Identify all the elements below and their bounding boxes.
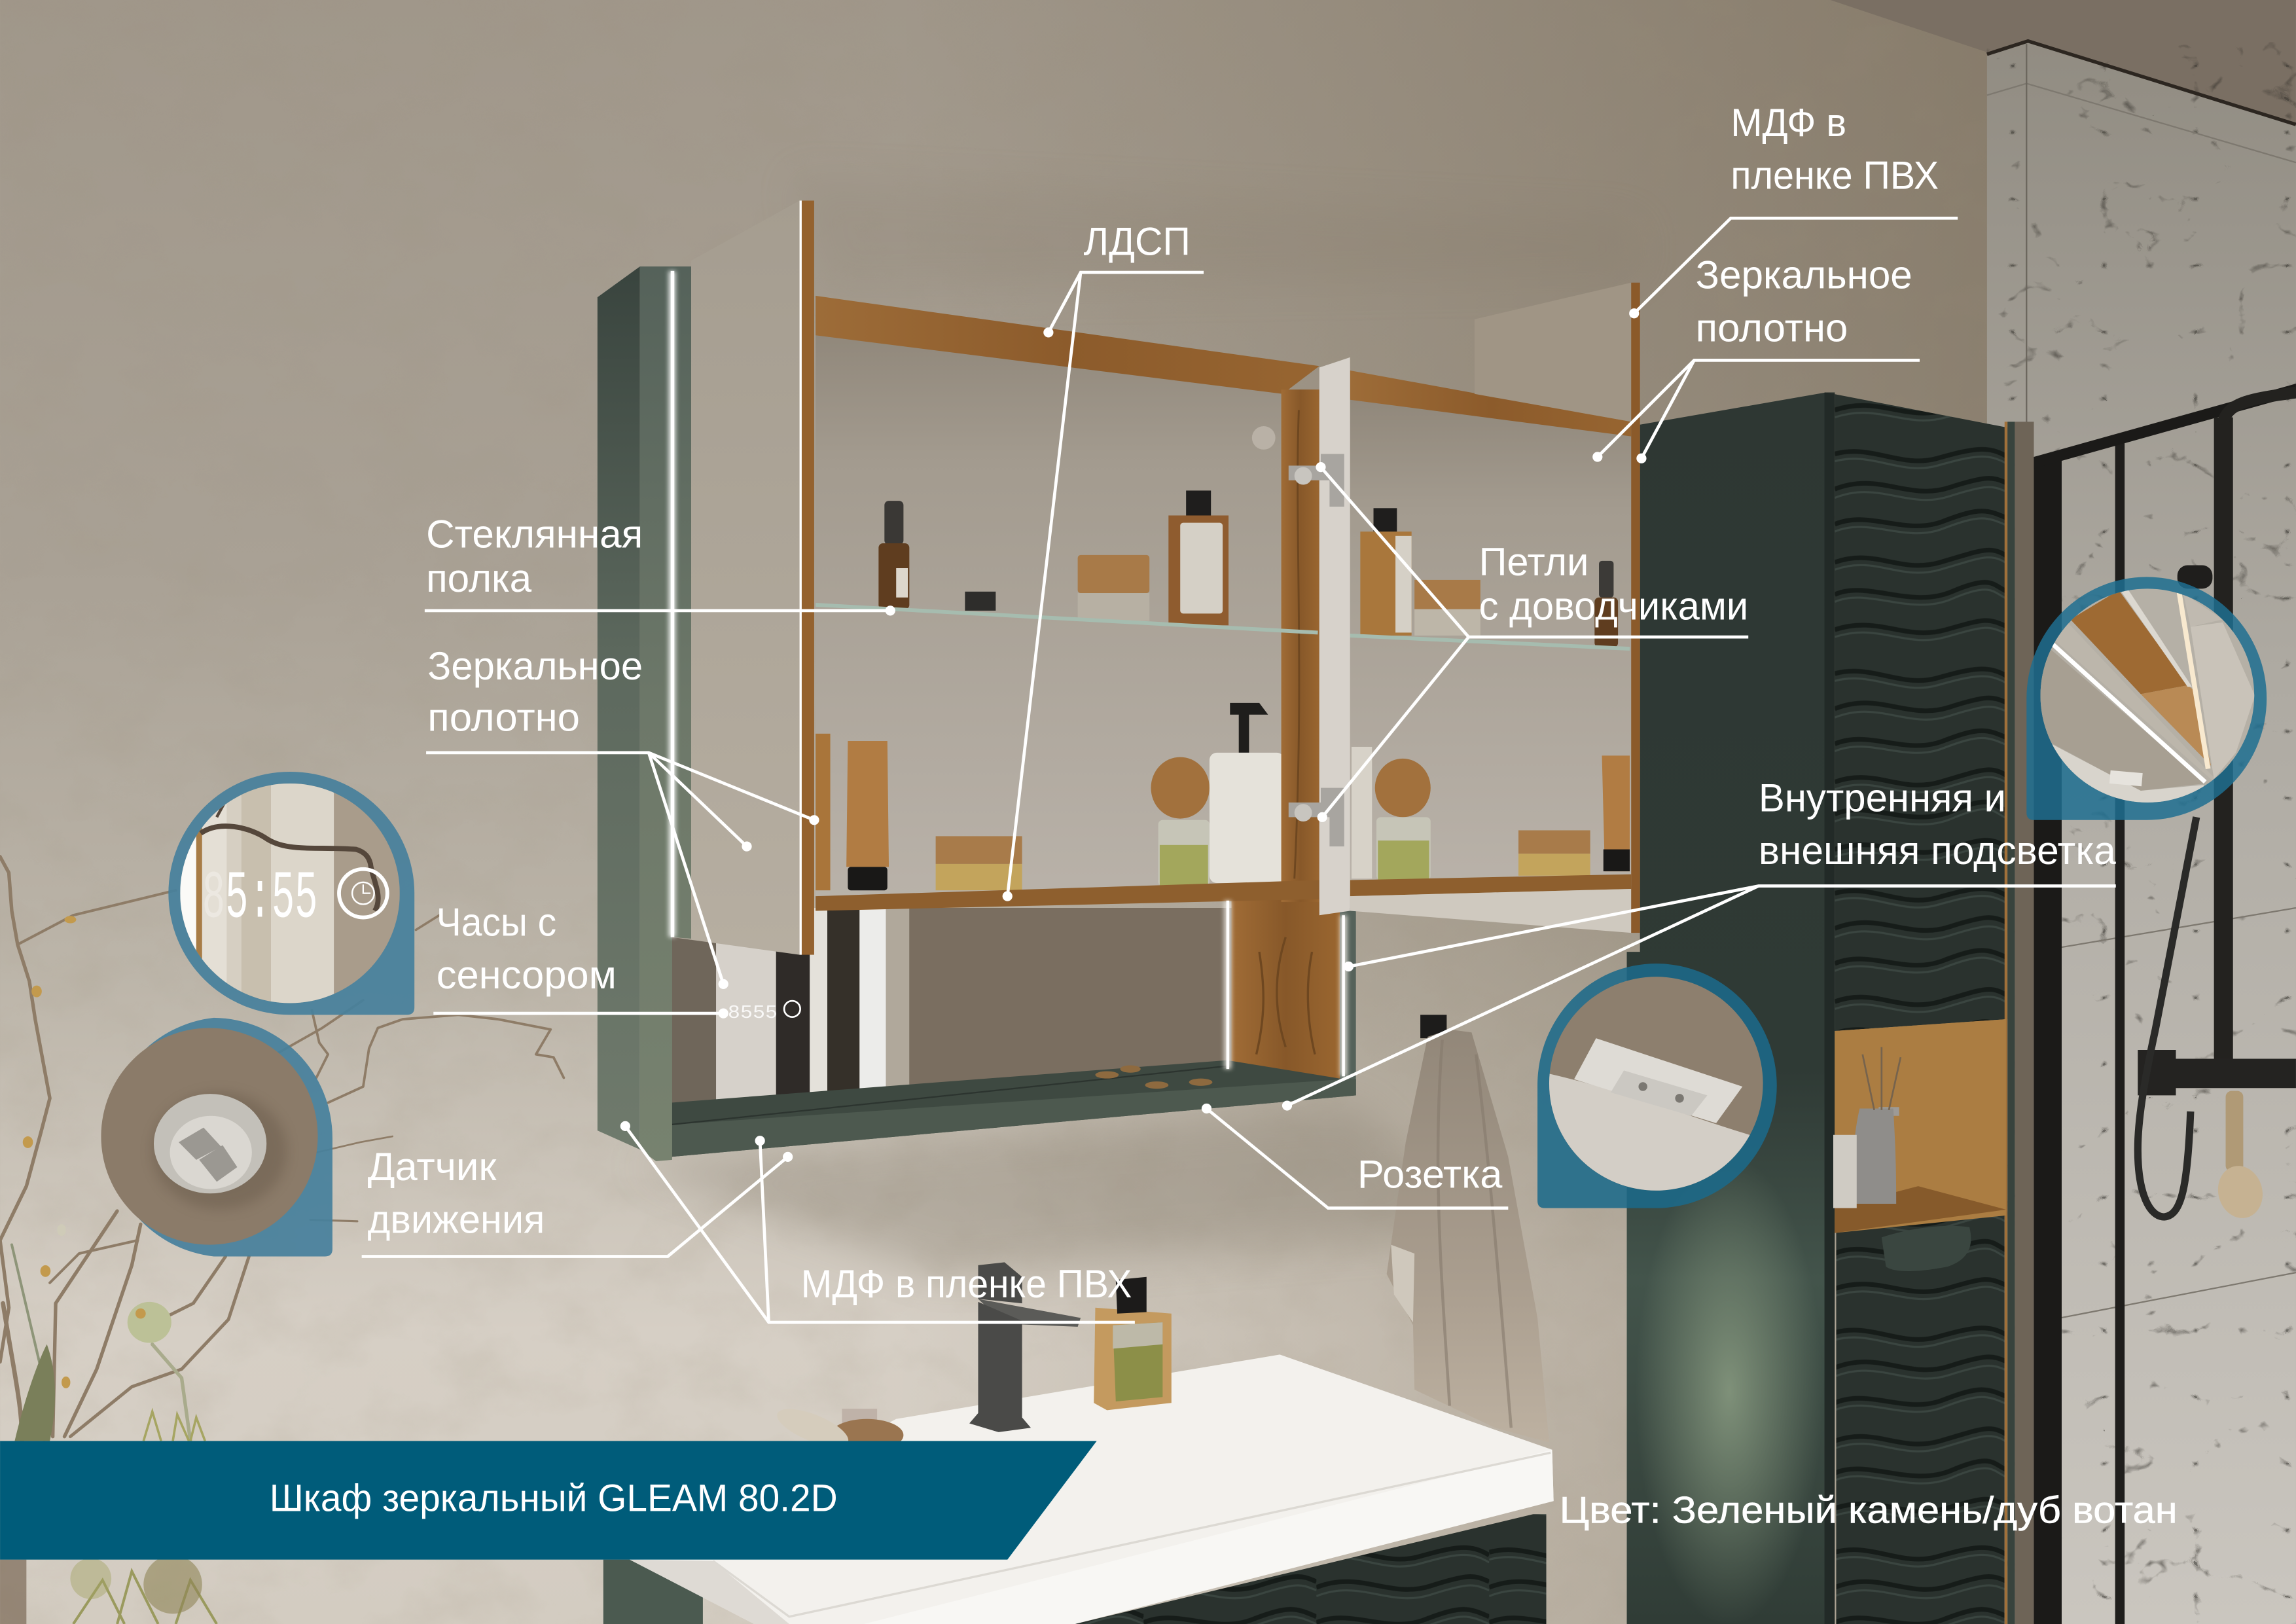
shelf bottles	[816, 490, 1630, 890]
lens: motion sensor	[101, 1018, 332, 1256]
label text: Зеркальное	[1696, 253, 1912, 297]
label text	[1759, 775, 2116, 873]
cabinet back panel	[816, 315, 1631, 901]
callout: MDF bottom	[620, 1121, 1135, 1322]
label text: МДФ в	[1731, 100, 1846, 145]
callout: LDSP	[1003, 219, 1204, 901]
callout: motion sensor	[362, 1144, 793, 1256]
label text: полка	[426, 556, 532, 600]
label text: Датчик	[368, 1144, 497, 1189]
wood column under divider	[1232, 897, 1356, 1095]
label text	[437, 900, 617, 997]
sink with vanity	[603, 1354, 1554, 1624]
LED strips	[668, 271, 1347, 1076]
label text	[368, 1144, 545, 1242]
glass shelves	[816, 605, 1630, 649]
banner title: Шкаф зеркальный GLEAM 80.2D	[270, 1477, 838, 1520]
marble shower wall with ceiling	[1831, 0, 2296, 1624]
lens: socket	[1537, 964, 1777, 1208]
label text	[1479, 539, 1748, 628]
plant buds, poppy and dill	[0, 916, 217, 1624]
label text	[1696, 253, 1912, 350]
label text: Стеклянная	[426, 512, 643, 556]
soap dish with brush	[772, 1401, 903, 1454]
callout: mirror top right	[1592, 253, 1920, 463]
label text: внешняя подсветка	[1759, 828, 2116, 873]
tall cabinet side	[1627, 393, 1835, 1624]
small clock display: 8555	[728, 1002, 778, 1024]
callout: soft-close hinges	[1316, 462, 1748, 822]
small clock display	[728, 1001, 800, 1024]
label text	[426, 512, 643, 600]
label text: Петли	[1479, 539, 1588, 584]
label text: пленке ПВХ	[1731, 153, 1939, 198]
label text: с доводчиками	[1479, 583, 1748, 628]
centre door edge with hinges	[1289, 357, 1350, 915]
cabinet bottom panel	[671, 1060, 1356, 1157]
lens: clock	[168, 772, 414, 1015]
faucet	[969, 1262, 1081, 1432]
label text: Зеркальное	[427, 643, 643, 688]
colour caption: Цвет: Зеленый камень/дуб вотан	[1560, 1490, 2178, 1532]
callout: MDF top right	[1629, 100, 1958, 318]
callout: glass shelf	[425, 512, 895, 615]
left open door	[672, 200, 814, 955]
label text: ЛДСП	[1084, 219, 1191, 263]
callout: socket	[1202, 1104, 1508, 1208]
label text: МДФ в пленке ПВХ	[801, 1261, 1132, 1306]
wood shelves and divider	[816, 296, 1631, 911]
label text: Розетка	[1357, 1151, 1503, 1196]
label text	[427, 643, 643, 739]
callout: mirror left	[426, 643, 819, 989]
tall cabinet wave fronts	[1826, 393, 2015, 1624]
shower frame and mixer	[2034, 384, 2296, 1624]
clock digits: 85:55	[202, 860, 318, 937]
plant branches	[0, 857, 564, 1441]
right door with mirror	[1350, 283, 1640, 933]
tall cabinet open niche	[1833, 1019, 2006, 1233]
callout: clock with sensor	[433, 900, 728, 1019]
mirror cabinet left side	[598, 266, 691, 1161]
soap bottle	[1094, 1277, 1172, 1410]
label text: Часы с	[437, 900, 556, 945]
label text: полотно	[427, 695, 580, 739]
towel with hook	[1387, 1015, 1549, 1443]
lower open mirror section	[671, 908, 1289, 1128]
label text: движения	[368, 1197, 545, 1242]
banner	[0, 1441, 1097, 1560]
label text: сенсором	[437, 952, 617, 997]
lens: lighting	[2026, 577, 2267, 820]
label text: полотно	[1696, 305, 1848, 350]
callout: inner and outer lighting	[1282, 775, 2116, 1111]
label text	[1731, 100, 1939, 198]
label text: Внутренняя и	[1759, 775, 2006, 820]
